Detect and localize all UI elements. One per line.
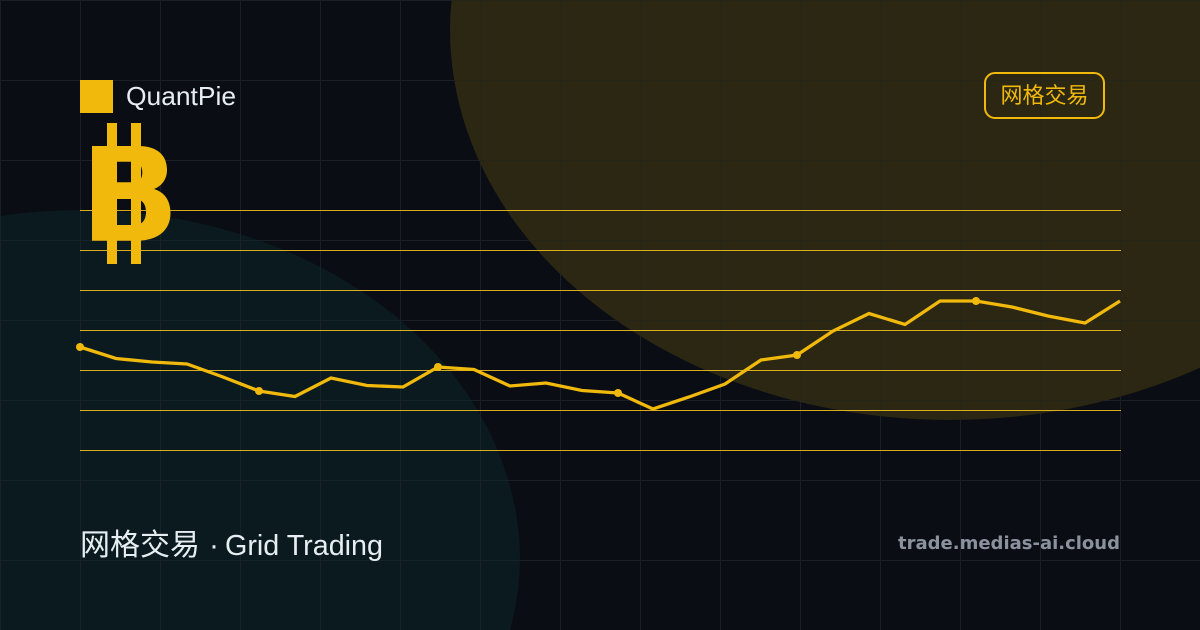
icon: bitcoin symbol	[92, 123, 170, 264]
footer title: ·	[209, 529, 219, 562]
logo square	[80, 80, 113, 113]
badge	[985, 73, 1104, 118]
background blob: teal	[0, 210, 520, 630]
grid price levels	[80, 210, 1121, 450]
badge: 网格交易	[1000, 78, 1089, 110]
brand name: QuantPie	[126, 81, 236, 111]
footer title: 网格交易	[80, 529, 200, 562]
footer url: trade.medias-ai.cloud	[898, 533, 1120, 554]
background blob: yellow	[450, 0, 1200, 420]
price line chart	[76, 297, 1120, 409]
footer title: Grid Trading	[225, 530, 383, 562]
footer title	[80, 529, 383, 562]
